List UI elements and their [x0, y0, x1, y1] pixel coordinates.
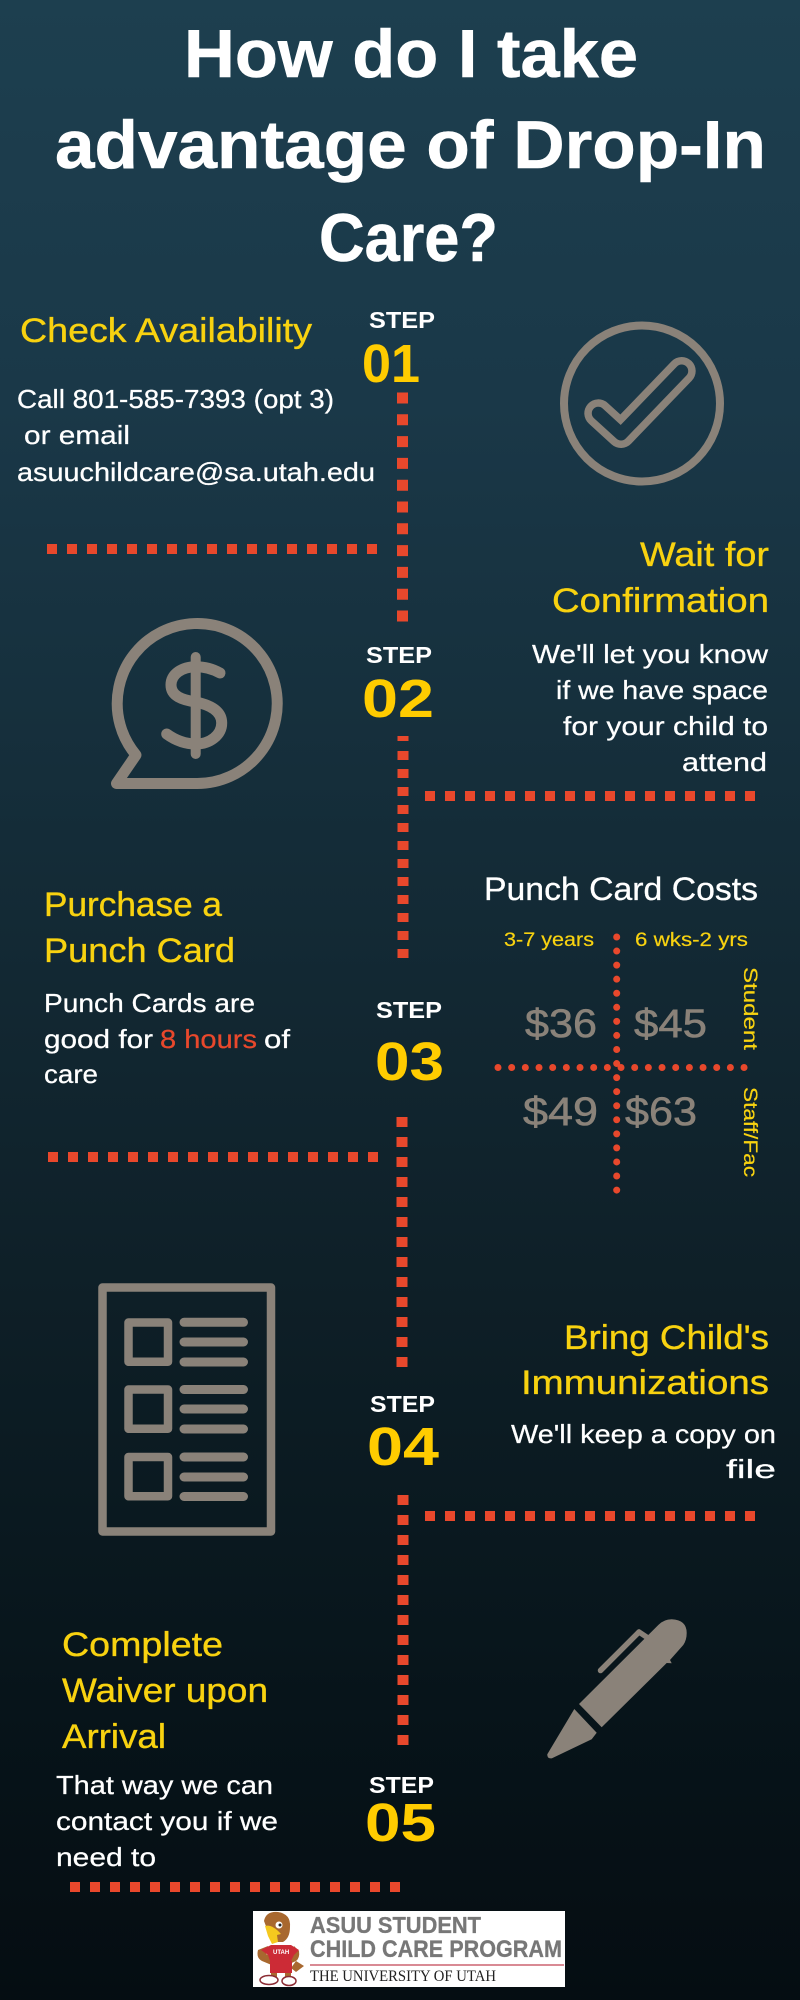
logo: ASUU Student Child Care Program	[253, 1911, 565, 1987]
row labels: Student	[739, 967, 761, 1051]
step 2 heading: Confirmation	[552, 582, 769, 620]
step 4 body text: We'll keep a copy on	[511, 1419, 776, 1449]
step 3 label: STEP	[376, 997, 442, 1023]
step 1 heading: Check Availability	[20, 312, 312, 350]
logo wordmark: THE UNIVERSITY OF UTAH	[310, 1968, 496, 1985]
step 3 body text: care	[44, 1059, 98, 1089]
step 5 body text: need to	[56, 1842, 156, 1872]
title: Care?	[319, 200, 498, 276]
step 5 heading	[62, 1626, 268, 1756]
step 4 label: STEP	[370, 1391, 435, 1417]
row labels: Staff/Fac	[739, 1087, 761, 1177]
step 3 body text: of	[264, 1024, 291, 1054]
title	[55, 16, 766, 276]
step 5 label: 05	[365, 1793, 436, 1853]
timeline: vertical dotted connectors	[402, 392, 403, 1745]
step 5 heading: Waiver upon	[62, 1672, 268, 1710]
prices: $49	[523, 1090, 598, 1134]
step 2 body text: if we have space	[556, 675, 768, 705]
step 3 body text	[44, 988, 291, 1089]
step 1 label	[362, 307, 435, 394]
step 2 body text: for your child to	[563, 711, 768, 741]
step 5 body text	[56, 1770, 278, 1872]
step 5 label: STEP	[369, 1772, 434, 1798]
step 1 body text: asuuchildcare@sa.utah.edu	[17, 457, 375, 487]
prices: $36	[525, 1002, 597, 1046]
icon: hawk mascot: UTAH	[273, 1950, 289, 1956]
timeline: horizontal dotted dividers	[47, 549, 756, 1887]
step 1 body text: Call 801-585-7393 (opt 3)	[17, 384, 334, 414]
step 1 body text	[17, 384, 375, 487]
prices: $63	[625, 1090, 697, 1134]
step 4 heading	[521, 1319, 769, 1402]
step 3 label	[375, 997, 444, 1092]
step 3 body text: good for	[44, 1024, 153, 1054]
step 5 heading: Complete	[62, 1626, 223, 1664]
step 2 label: 02	[362, 669, 434, 729]
step 2 body text: attend	[682, 747, 767, 777]
icon: dollar speech bubble	[116, 624, 277, 784]
icon: pen	[547, 1619, 687, 1758]
icon: checklist document	[102, 1288, 271, 1532]
step 4 body text: file	[726, 1454, 776, 1484]
dotted cross grid	[498, 937, 745, 1191]
title: How do I take	[184, 16, 638, 92]
icon: check mark in circle	[564, 326, 720, 482]
icon: hawk mascot	[258, 1912, 304, 1986]
step 4 body text	[511, 1419, 776, 1484]
row labels	[739, 967, 761, 1177]
step 4 label	[367, 1391, 439, 1477]
step 2 label: STEP	[366, 642, 432, 668]
step 3 body text: 8 hours	[160, 1024, 257, 1054]
column labels	[504, 929, 748, 951]
costs heading: Punch Card Costs	[484, 871, 758, 907]
logo wordmark: ASUU STUDENT	[310, 1912, 481, 1938]
step 4 heading: Bring Child's	[564, 1319, 769, 1357]
step 4 label: 04	[367, 1417, 439, 1477]
step 2 label	[362, 642, 434, 729]
prices: $45	[634, 1002, 707, 1046]
step 3 body text: Punch Cards are	[44, 988, 255, 1018]
title: advantage of Drop-In	[55, 107, 766, 183]
step 4 heading: Immunizations	[521, 1364, 769, 1402]
step 5 heading: Arrival	[62, 1718, 166, 1756]
step 3 heading	[44, 886, 235, 970]
step 2 body text: We'll let you know	[532, 639, 768, 669]
column labels: 6 wks-2 yrs	[635, 929, 748, 951]
step 3 heading: Purchase a	[44, 886, 222, 924]
step 5 body text: That way we can	[56, 1770, 273, 1800]
column labels: 3-7 years	[504, 929, 594, 951]
logo wordmark	[310, 1912, 564, 1985]
step 2 heading	[552, 536, 769, 620]
step 5 body text: contact you if we	[56, 1806, 278, 1836]
step 3 heading: Punch Card	[44, 932, 235, 970]
panel: punch card costs	[484, 871, 761, 1191]
step 1 label: 01	[362, 334, 420, 394]
step 1 label: STEP	[369, 307, 435, 333]
logo wordmark: CHILD CARE PROGRAM	[310, 1936, 562, 1963]
prices	[523, 1002, 707, 1134]
step 2 heading: Wait for	[640, 536, 769, 574]
step 2 body text	[532, 639, 768, 777]
step 5 label	[365, 1772, 436, 1853]
step 3 label: 03	[375, 1032, 444, 1092]
step 1 body text: or email	[24, 420, 130, 450]
